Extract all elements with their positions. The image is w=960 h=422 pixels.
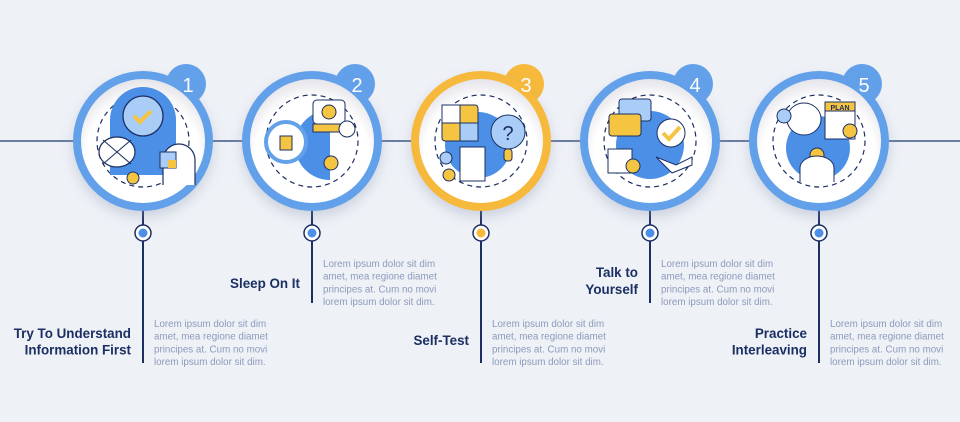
timeline horizontal line xyxy=(0,140,960,142)
step 1 xyxy=(14,64,268,368)
badge 4 xyxy=(673,64,713,104)
step 5 xyxy=(732,64,944,368)
body 5: lorem ipsum dolor sit dim. xyxy=(830,357,942,368)
circle 1 xyxy=(73,71,213,211)
title 2: Sleep On It xyxy=(230,276,301,291)
icon: talk xyxy=(604,95,696,187)
icon: plan brain xyxy=(773,95,865,187)
badge number 1: 1 xyxy=(182,75,194,97)
body 4: lorem ipsum dolor sit dim. xyxy=(661,297,773,308)
dot 4 xyxy=(642,225,658,241)
body 4: principes at. Cum no movi xyxy=(661,284,774,295)
dot 5 xyxy=(811,225,827,241)
body 4: Lorem ipsum dolor sit dim xyxy=(661,259,773,270)
dot 3 xyxy=(473,225,489,241)
circle 3 xyxy=(411,71,551,211)
badge 2 xyxy=(335,64,375,104)
step 3 xyxy=(411,64,606,368)
badge 3 xyxy=(504,64,544,104)
circle 2 xyxy=(242,71,382,211)
title 5: Practice xyxy=(755,326,807,341)
body 5: amet, mea regione diamet xyxy=(830,332,944,343)
circle 4 xyxy=(580,71,720,211)
badge number 4: 4 xyxy=(689,75,701,97)
circle 5 xyxy=(749,71,889,211)
body 5: Lorem ipsum dolor sit dim xyxy=(830,319,942,330)
body 1: Lorem ipsum dolor sit dim xyxy=(154,319,266,330)
icon: puzzle question xyxy=(435,95,527,187)
body 1: lorem ipsum dolor sit dim. xyxy=(154,357,266,368)
icon: gear brain head xyxy=(97,87,195,187)
title 5: Interleaving xyxy=(732,342,807,358)
body 2: amet, mea regione diamet xyxy=(323,272,437,283)
badge number 5: 5 xyxy=(858,75,870,97)
step 4 xyxy=(580,64,775,308)
body 3: Lorem ipsum dolor sit dim xyxy=(492,319,604,330)
dot 2 xyxy=(304,225,320,241)
body 2: lorem ipsum dolor sit dim. xyxy=(323,297,435,308)
icon: puzzle question: ? xyxy=(502,123,514,145)
body 3: lorem ipsum dolor sit dim. xyxy=(492,357,604,368)
body 2: principes at. Cum no movi xyxy=(323,284,436,295)
body 1: amet, mea regione diamet xyxy=(154,332,268,343)
icon: plan brain: PLAN xyxy=(830,105,850,112)
title 4: Yourself xyxy=(585,282,639,297)
body 5: principes at. Cum no movi xyxy=(830,344,943,355)
body 3: amet, mea regione diamet xyxy=(492,332,606,343)
title 1: Information First xyxy=(25,342,132,358)
body 2: Lorem ipsum dolor sit dim xyxy=(323,259,435,270)
step 2 xyxy=(230,64,437,308)
title 4: Talk to xyxy=(596,265,638,280)
title 1: Try To Understand xyxy=(14,326,131,341)
body 3: principes at. Cum no movi xyxy=(492,344,605,355)
dot 1 xyxy=(135,225,151,241)
body 1: principes at. Cum no movi xyxy=(154,344,267,355)
badge 5 xyxy=(842,64,882,104)
title 3: Self-Test xyxy=(413,333,470,348)
icon: sleep xyxy=(266,95,358,187)
badge number 3: 3 xyxy=(520,75,532,97)
badge 1 xyxy=(166,64,206,104)
body 4: amet, mea regione diamet xyxy=(661,272,775,283)
badge number 2: 2 xyxy=(351,75,363,97)
